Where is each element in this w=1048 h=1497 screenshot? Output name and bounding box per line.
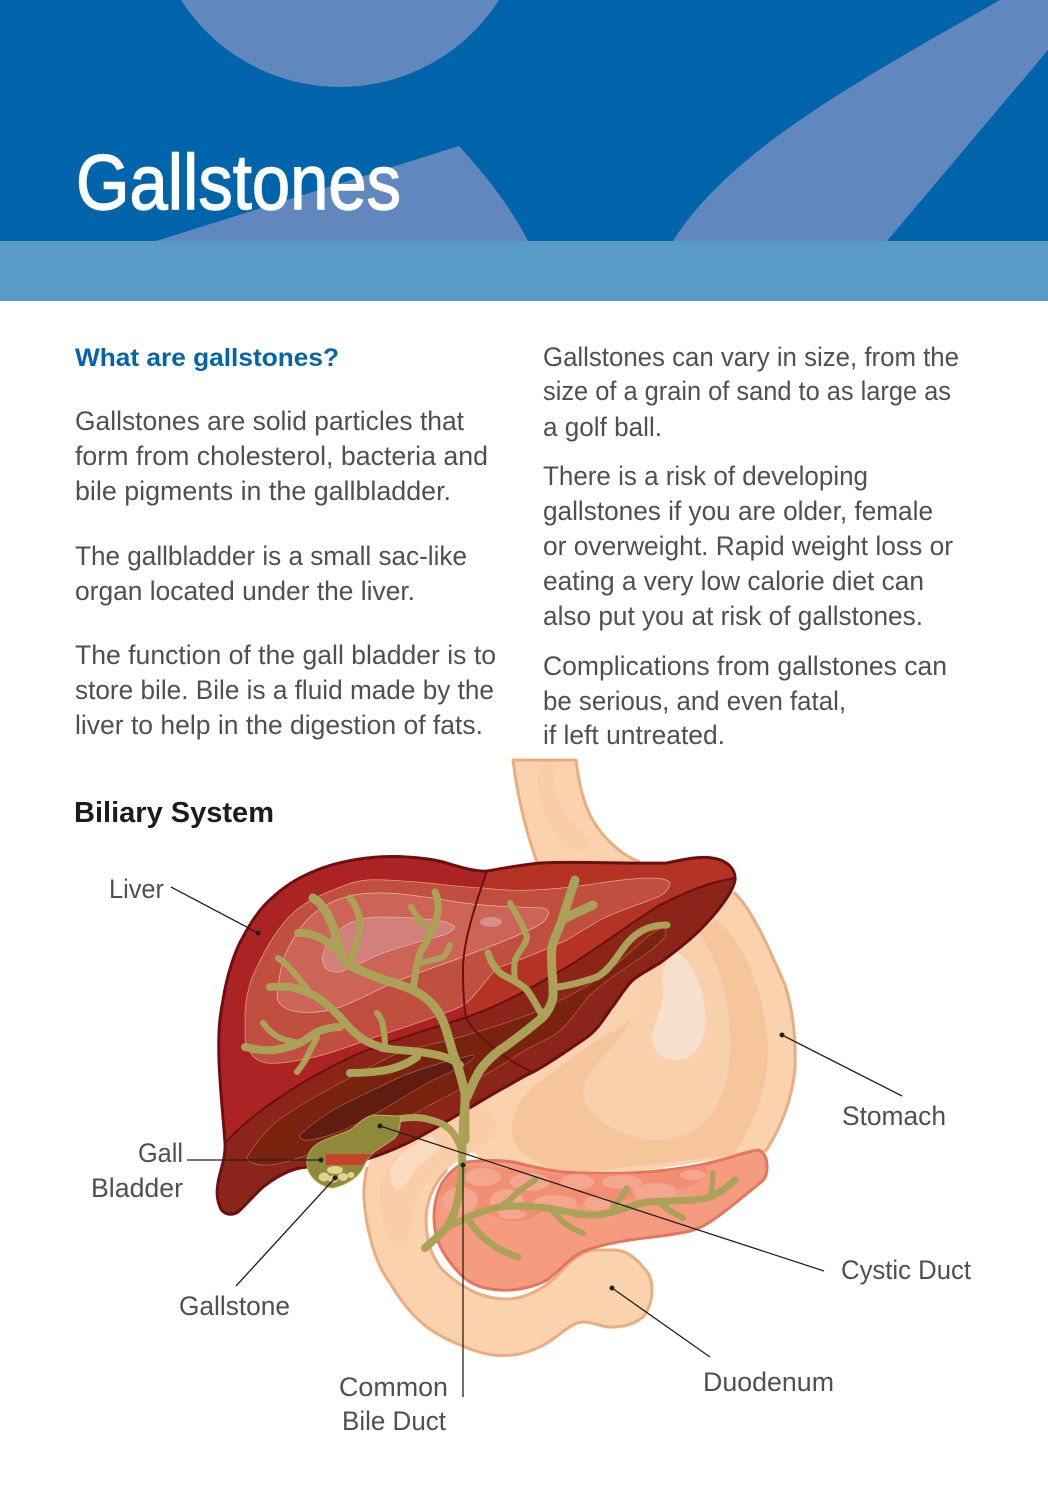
liver [216,855,737,1216]
heading: biliary system: Biliary System [74,797,274,829]
stomach inner shade [583,933,730,1140]
paragraph: size: a golf ball. [543,412,662,442]
label: duodenum: Duodenum [703,1367,834,1397]
liver dividing lines [225,871,735,1143]
paragraph: risk: or overweight. Rapid weight loss or [543,531,953,561]
bile ducts [245,880,735,1257]
decorative wedge left [156,146,528,241]
paragraph: complications: if left untreated. [543,720,725,750]
pancreas lobules [440,1165,707,1221]
paragraph: risk: gallstones if you are older, female [543,496,933,526]
paragraph: function: The function of the gall bladder is to [75,640,496,670]
paragraph: function: liver to help in the digestion of fats. [75,710,483,740]
paragraph: risk [543,461,953,631]
paragraph: risk: also put you at risk of gallstones. [543,601,923,631]
under surface band [247,927,666,1165]
label: liver: Liver [109,874,164,904]
right text column [543,342,959,750]
label: gall bladder: Bladder [91,1173,183,1203]
gallbladder [307,1115,400,1188]
stomach mid shade [512,920,768,1175]
paragraph: definition: bile pigments in the gallbladder. [75,476,451,506]
stomach outline [513,760,795,1152]
paragraph: definition: Gallstones are solid particles that [75,406,464,436]
left text column [75,344,496,740]
label: common bile duct: Common [339,1372,448,1402]
decorative wedge right [673,0,1048,241]
header banner [0,0,1048,301]
paragraph: definition: form from cholesterol, bacteria and [75,441,488,471]
label: common bile duct [339,1162,466,1436]
paragraph: complications: be serious, and even fatal, [543,686,846,716]
liver highlight layer 2 [277,893,548,1012]
biliary system diagram [91,760,971,1436]
decorative circle [151,0,529,87]
label: stomach [780,1032,946,1131]
paragraph: complications [543,651,947,750]
label: liver [109,874,260,936]
paragraph: definition [75,406,488,506]
paragraph: gallbladder location: The gallbladder is a small sac-like [75,541,467,571]
duodenum light patch [390,1135,440,1190]
liver outline [217,856,735,1214]
label: gall bladder [91,1138,324,1203]
title: Gallstones [76,138,401,226]
under surface [205,878,740,1230]
under surface darkest band [300,1055,474,1140]
stomach and esophagus [470,760,795,1190]
paragraph: size: Gallstones can vary in size, from the [543,342,959,372]
liver highlight layer 1 [245,878,670,1063]
paragraph: risk: eating a very low calorie diet can [543,566,924,596]
header light band [0,241,1048,301]
label: gallstone: Gallstone [179,1291,290,1321]
paragraph: size [543,342,959,442]
label: duodenum [610,1286,834,1397]
paragraph: function [75,640,496,740]
paragraph: gallbladder location [75,541,467,606]
bile in gallbladder [326,1154,372,1165]
heading: what are gallstones: What are gallstones? [75,344,339,372]
paragraph: function: store bile. Bile is a fluid made by the [75,675,494,705]
duodenum [364,1100,652,1355]
paragraph: complications: Complications from gallstones can [543,651,947,681]
label: cystic duct [378,1124,971,1285]
label: gallstone [179,1176,338,1321]
label: stomach: Stomach [842,1101,946,1131]
paragraph: risk: There is a risk of developing [543,461,868,491]
liver highlight spot [480,917,502,927]
stomach highlight [652,952,706,1060]
pancreas [434,1150,767,1290]
gallstones [318,1166,354,1182]
duodenum outline [364,1167,652,1355]
label: cystic duct: Cystic Duct [841,1255,971,1285]
duodenum shading [379,1100,497,1250]
right lobe [466,859,734,1016]
paragraph: size: size of a grain of sand to as large as [543,376,951,406]
paragraph: gallbladder location: organ located under the liver. [75,576,415,606]
label: common bile duct: Bile Duct [342,1406,446,1436]
liver highlight layer 3 [322,917,455,972]
esophagus shading [537,762,590,852]
label: gall bladder: Gall [138,1138,183,1168]
cystic duct [398,1118,462,1153]
